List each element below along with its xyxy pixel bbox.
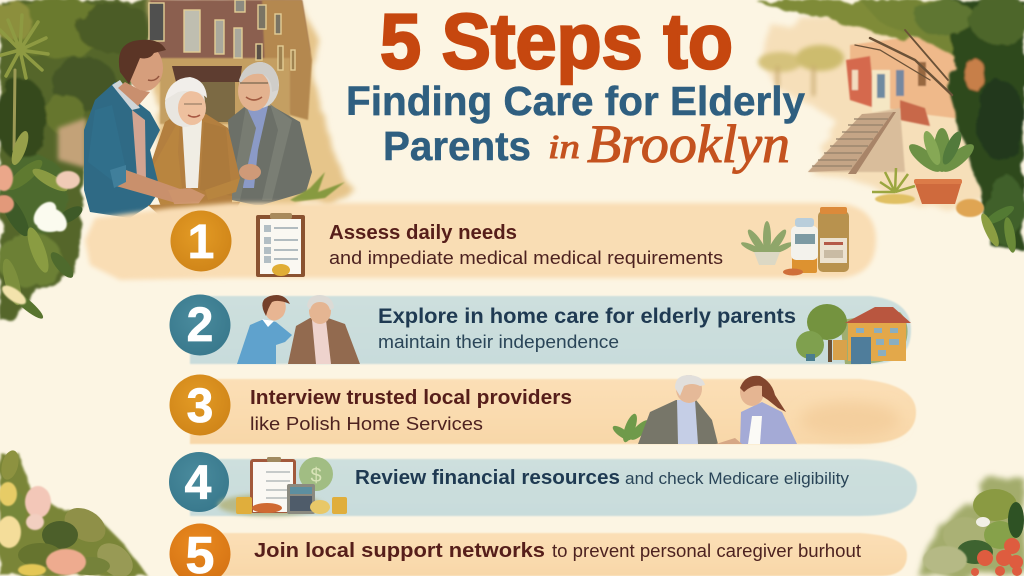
step 1 text: Assess daily needs	[329, 222, 517, 244]
step 3 text: like Polish Home Services	[250, 413, 483, 434]
title: Parents	[383, 123, 531, 169]
step 2 band	[170, 294, 911, 364]
potted plant	[905, 128, 978, 204]
step 3 band	[170, 374, 916, 444]
illustration: finance clipboard, calculator, coins	[218, 457, 347, 516]
number badge 4: 4	[185, 457, 212, 510]
number badge 2	[170, 294, 230, 356]
number badge 3	[170, 374, 230, 436]
band 1 background wash	[85, 203, 876, 280]
person: young man	[84, 40, 183, 218]
step 1 text	[329, 222, 723, 268]
illustration: nurse and elderly man	[237, 295, 360, 364]
number badge 5	[169, 523, 230, 576]
dense foliage at edge	[978, 203, 1018, 254]
foliage: bottom-right flowers	[918, 478, 1024, 576]
scene: brick building	[149, 0, 360, 215]
building windows	[149, 0, 295, 70]
handshake	[168, 188, 205, 208]
step 1 text: and impediate medical medical requirements	[329, 247, 723, 268]
step 5 text: to prevent personal caregiver burhout	[552, 541, 861, 561]
step 3 text	[250, 386, 572, 434]
distant trees	[758, 45, 844, 96]
step 3 text: Interview trusted local providers	[250, 386, 572, 409]
illustration: finance clipboard, calculator, coins: $	[310, 465, 322, 487]
step 1 band	[85, 203, 876, 280]
icon: medicine bottles and plant	[740, 207, 849, 276]
spiky palm plant	[0, 15, 48, 150]
number badge 2: 2	[187, 299, 213, 352]
brownstone facade	[846, 30, 970, 126]
title: Brooklyn	[587, 114, 790, 174]
title: Finding Care for Elderly	[346, 78, 805, 124]
band 2 background	[190, 296, 911, 364]
scene: left tree and foliage	[0, 0, 158, 322]
yucca plant	[872, 168, 915, 192]
step 5 text: Join local support networks	[254, 539, 545, 562]
person: older man	[228, 62, 312, 205]
tan backdrop behind leaves	[58, 118, 86, 168]
small plant	[290, 172, 345, 202]
band 4 background	[190, 459, 917, 516]
step 4 band	[169, 452, 917, 516]
scene: right brownstone street	[755, 0, 1024, 254]
step 2 text	[378, 305, 796, 352]
step 4 text: and check Medicare eligibility	[625, 469, 850, 488]
people: family group in handshake	[84, 40, 345, 218]
title: in	[548, 129, 580, 166]
step 4 text	[355, 466, 850, 489]
flowers	[0, 165, 13, 191]
number badge 1	[170, 210, 232, 272]
person: elderly woman	[148, 77, 240, 210]
icon: clipboard checklist	[256, 213, 305, 277]
tree branches	[855, 30, 952, 95]
step 4 text: Review financial resources	[355, 466, 620, 489]
illustration: man with carer	[611, 375, 797, 444]
stoop stairs	[808, 108, 905, 174]
band 3 background	[190, 379, 916, 444]
icon: house with tree	[796, 304, 911, 364]
number badge 3: 3	[187, 380, 213, 433]
title	[346, 0, 805, 174]
number badge 4	[169, 452, 229, 512]
leaf cluster	[0, 129, 85, 322]
step 2 text: maintain their independence	[378, 332, 619, 352]
band 5 background	[190, 533, 907, 576]
step 5 band	[169, 523, 907, 576]
tree canopy	[755, 0, 1024, 250]
foliage: bottom-left flowers	[0, 448, 148, 576]
step 5 text	[254, 539, 861, 562]
number badge 1: 1	[188, 216, 214, 269]
step 2 text: Explore in home care for elderly parents	[378, 305, 796, 328]
